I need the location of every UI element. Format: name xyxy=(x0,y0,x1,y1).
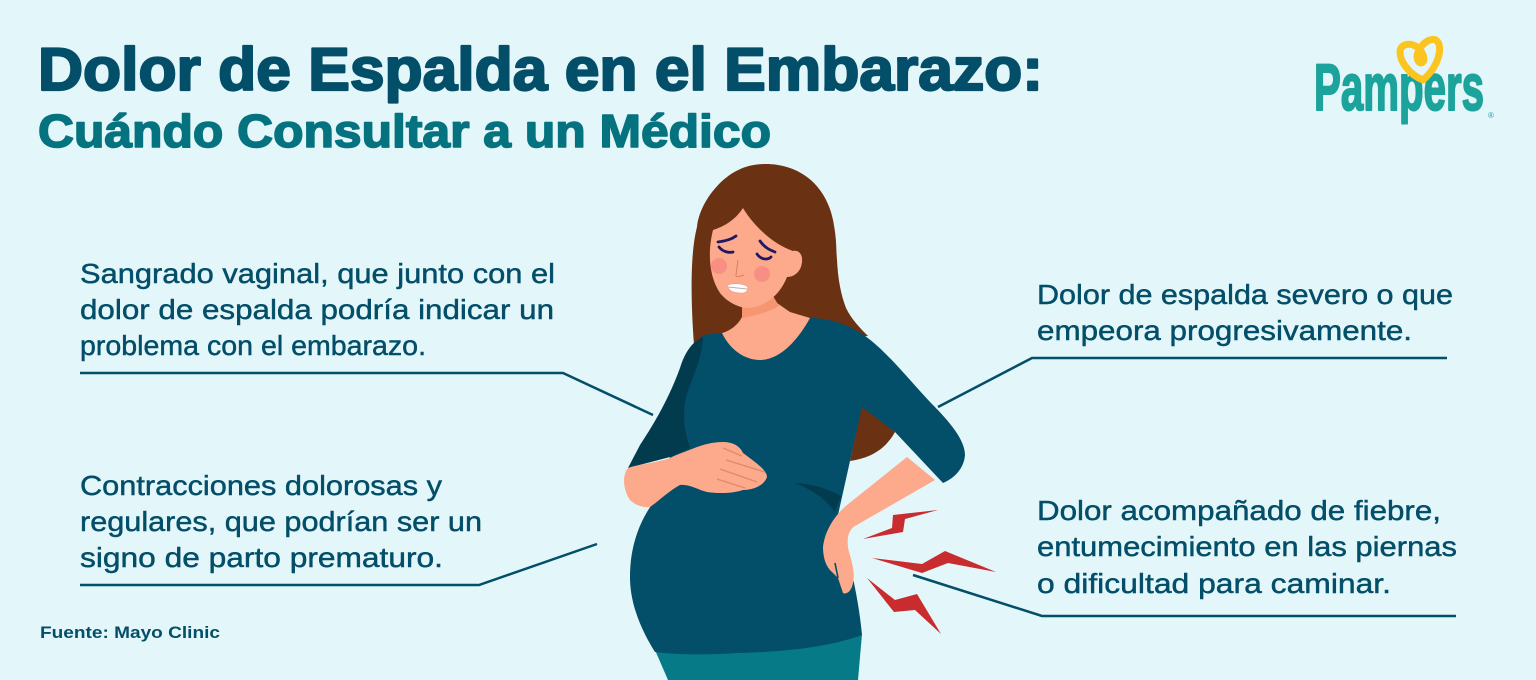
mouth xyxy=(727,284,748,293)
illustration: pregnant woman xyxy=(624,164,996,680)
text block: severe pain: empeora progresivamente. xyxy=(1037,315,1412,346)
text block: vaginal bleeding: Sangrado vaginal, que junto con el xyxy=(80,258,555,289)
leader line: bottom right xyxy=(913,575,1456,616)
eyebrows and eyes xyxy=(718,236,775,259)
torso and sleeve xyxy=(630,318,965,654)
face xyxy=(710,208,802,308)
right arm and hand xyxy=(823,457,935,593)
lower hair behind torso xyxy=(850,405,895,461)
leader line: top left xyxy=(80,373,653,415)
text block: vaginal bleeding xyxy=(80,258,555,361)
finger slit xyxy=(835,563,838,578)
text block: severe pain: Dolor de espalda severo o que xyxy=(1037,279,1453,310)
leader line: bottom left xyxy=(80,544,597,585)
text block: contractions: signo de parto prematuro. xyxy=(80,542,443,573)
cheeks xyxy=(711,258,770,282)
title: Dolor de Espalda en el Embarazo: xyxy=(38,36,1043,103)
text block: vaginal bleeding: problema con el embarazo. xyxy=(80,330,426,361)
belly shadow xyxy=(795,483,841,512)
text block: vaginal bleeding: dolor de espalda podría indicar un xyxy=(80,294,554,325)
text block: contractions: regulares, que podrían ser un xyxy=(80,506,482,537)
pain bolts xyxy=(863,510,996,634)
pants xyxy=(655,634,862,680)
source note: Fuente: Mayo Clinic xyxy=(40,623,220,642)
logo: Pampers xyxy=(1314,39,1494,124)
text block: severe pain xyxy=(1037,279,1453,346)
nose xyxy=(736,260,744,276)
text block: contractions xyxy=(80,470,482,573)
dark sleeve xyxy=(628,337,703,468)
neck xyxy=(722,303,810,360)
hair xyxy=(692,164,868,345)
text block: fever and numbness xyxy=(1037,495,1457,599)
subtitle: Cuándo Consultar a un Médico xyxy=(38,105,771,157)
logo registered mark: ® xyxy=(1488,111,1494,120)
leader line: top right xyxy=(938,358,1447,407)
text block: fever and numbness: entumecimiento en las piernas xyxy=(1037,531,1457,562)
text block: fever and numbness: o dificultad para caminar. xyxy=(1037,568,1391,599)
icon: heart xyxy=(1400,39,1440,80)
neck shadow xyxy=(742,296,779,318)
text block: fever and numbness: Dolor acompañado de fiebre, xyxy=(1037,495,1441,526)
text block: contractions: Contracciones dolorosas y xyxy=(80,470,442,501)
finger lines xyxy=(717,448,765,488)
left hand and forearm xyxy=(624,442,767,507)
